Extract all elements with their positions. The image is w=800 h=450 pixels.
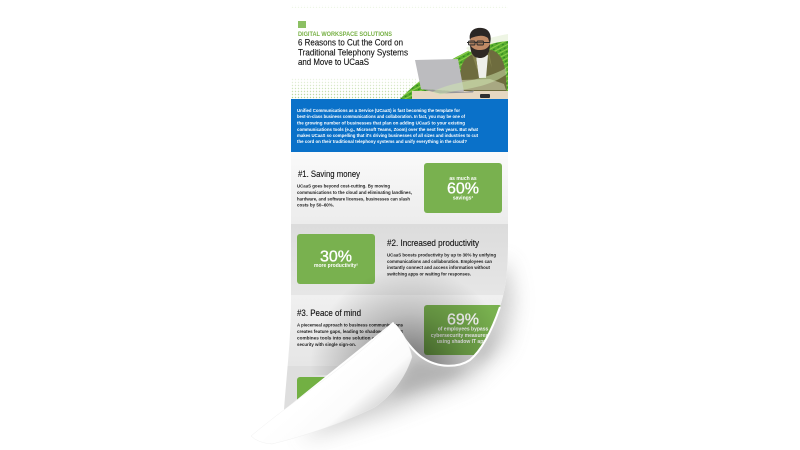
intro blue banner: the cord on their traditional telephony systems and unify everything in the cloud? <box>297 139 467 145</box>
section 1: saving money: hardware, and software licenses, businesses can slash <box>297 196 410 202</box>
stat card: 69% employees: cybersecurity measures by <box>431 333 495 339</box>
intro blue banner: Unified Communications as a Service (UCaaS) is fast becoming the template for <box>297 108 460 114</box>
main title: 6 Reasons to Cut the Cord on <box>298 38 403 48</box>
section 3: peace of mind: A piecemeal approach to business communications <box>297 323 403 329</box>
phone <box>480 94 490 98</box>
stat card: 60% savings: savings² <box>453 196 473 202</box>
section 2: increased productivity: switching apps or waiting for responses. <box>387 272 471 278</box>
section 1: saving money: #1. Saving money <box>298 169 360 179</box>
logo mark <box>298 21 306 28</box>
section 2: increased productivity: #2. Increased productivity <box>387 238 479 248</box>
stat card: 30% productivity <box>297 234 375 284</box>
stat card: 69% employees: of employees bypass <box>438 327 489 333</box>
hero header <box>291 5 508 99</box>
white rim under curl <box>404 307 500 366</box>
laptop <box>415 59 474 94</box>
section 3: peace of mind: combines tools into one solution and enhances <box>297 336 403 342</box>
section 3: peace of mind: security with single sign-on. <box>297 342 356 348</box>
intro blue banner: makes UCaaS so compelling that it's driving businesses of all sizes and industries to cut <box>297 133 478 139</box>
category label: DIGITAL WORKSPACE SOLUTIONS <box>298 31 393 38</box>
intro blue banner: the growing number of businesses that plan on adding UCaaS to your existing <box>297 120 465 126</box>
page drop shadow <box>300 260 514 440</box>
translucent green ribbon <box>432 68 507 95</box>
stat card: 30% productivity: more productivity² <box>314 263 358 269</box>
stat card: 60% savings: as much as <box>449 176 477 182</box>
stat card: 30% productivity: 30% <box>320 248 352 266</box>
intro blue banner: best-in-class business communications and collaboration. In fact, you may be one of <box>297 114 465 120</box>
stat card: 60% savings <box>424 163 502 213</box>
section 1: saving money: UCaaS goes beyond cost-cutting. By moving <box>297 184 390 190</box>
green swoosh <box>400 34 508 99</box>
main title: and Move to UCaaS <box>298 57 369 67</box>
stat card: 69% employees: 69% <box>447 312 479 328</box>
main title <box>298 39 408 65</box>
stat card: 69% employees <box>424 305 502 355</box>
table <box>412 91 508 99</box>
section 2: increased productivity: communications and collaboration. Employees can <box>387 259 492 265</box>
intro blue banner <box>291 99 508 152</box>
section 4 <box>284 366 338 410</box>
top dot strip <box>292 6 506 8</box>
stat card: 69% employees: using shadow IT apps <box>437 339 489 345</box>
man in jacket <box>460 28 507 91</box>
section 3: peace of mind: #3. Peace of mind <box>297 308 361 318</box>
section 1: saving money <box>291 163 508 224</box>
section 2: increased productivity: UCaaS boosts productivity by up to 30% by unifying <box>387 253 496 259</box>
curled page sheet <box>284 6 508 410</box>
section 2: increased productivity: instantly connect and access information without <box>387 265 490 271</box>
page curl flap <box>251 322 412 444</box>
section 1: saving money: communications to the cloud and eliminating landlines, <box>297 190 413 196</box>
section 3: peace of mind: creates feature gaps, leading to shadow IT. UCaaS <box>297 329 404 335</box>
stat card partially hidden <box>297 377 325 400</box>
curl shadow on page <box>318 276 490 375</box>
bottom-left dot pattern <box>291 78 416 99</box>
main title: Traditional Telephony Systems <box>298 48 408 58</box>
intro blue banner: communications tools (e.g., Microsoft Teams, Zoom) over the next few years. But what <box>297 127 478 133</box>
section 3: peace of mind <box>280 295 515 366</box>
stat card: 60% savings: 60% <box>447 180 479 198</box>
section 1: saving money: costs by 50–60%. <box>297 203 334 209</box>
section 2: increased productivity <box>280 224 515 295</box>
